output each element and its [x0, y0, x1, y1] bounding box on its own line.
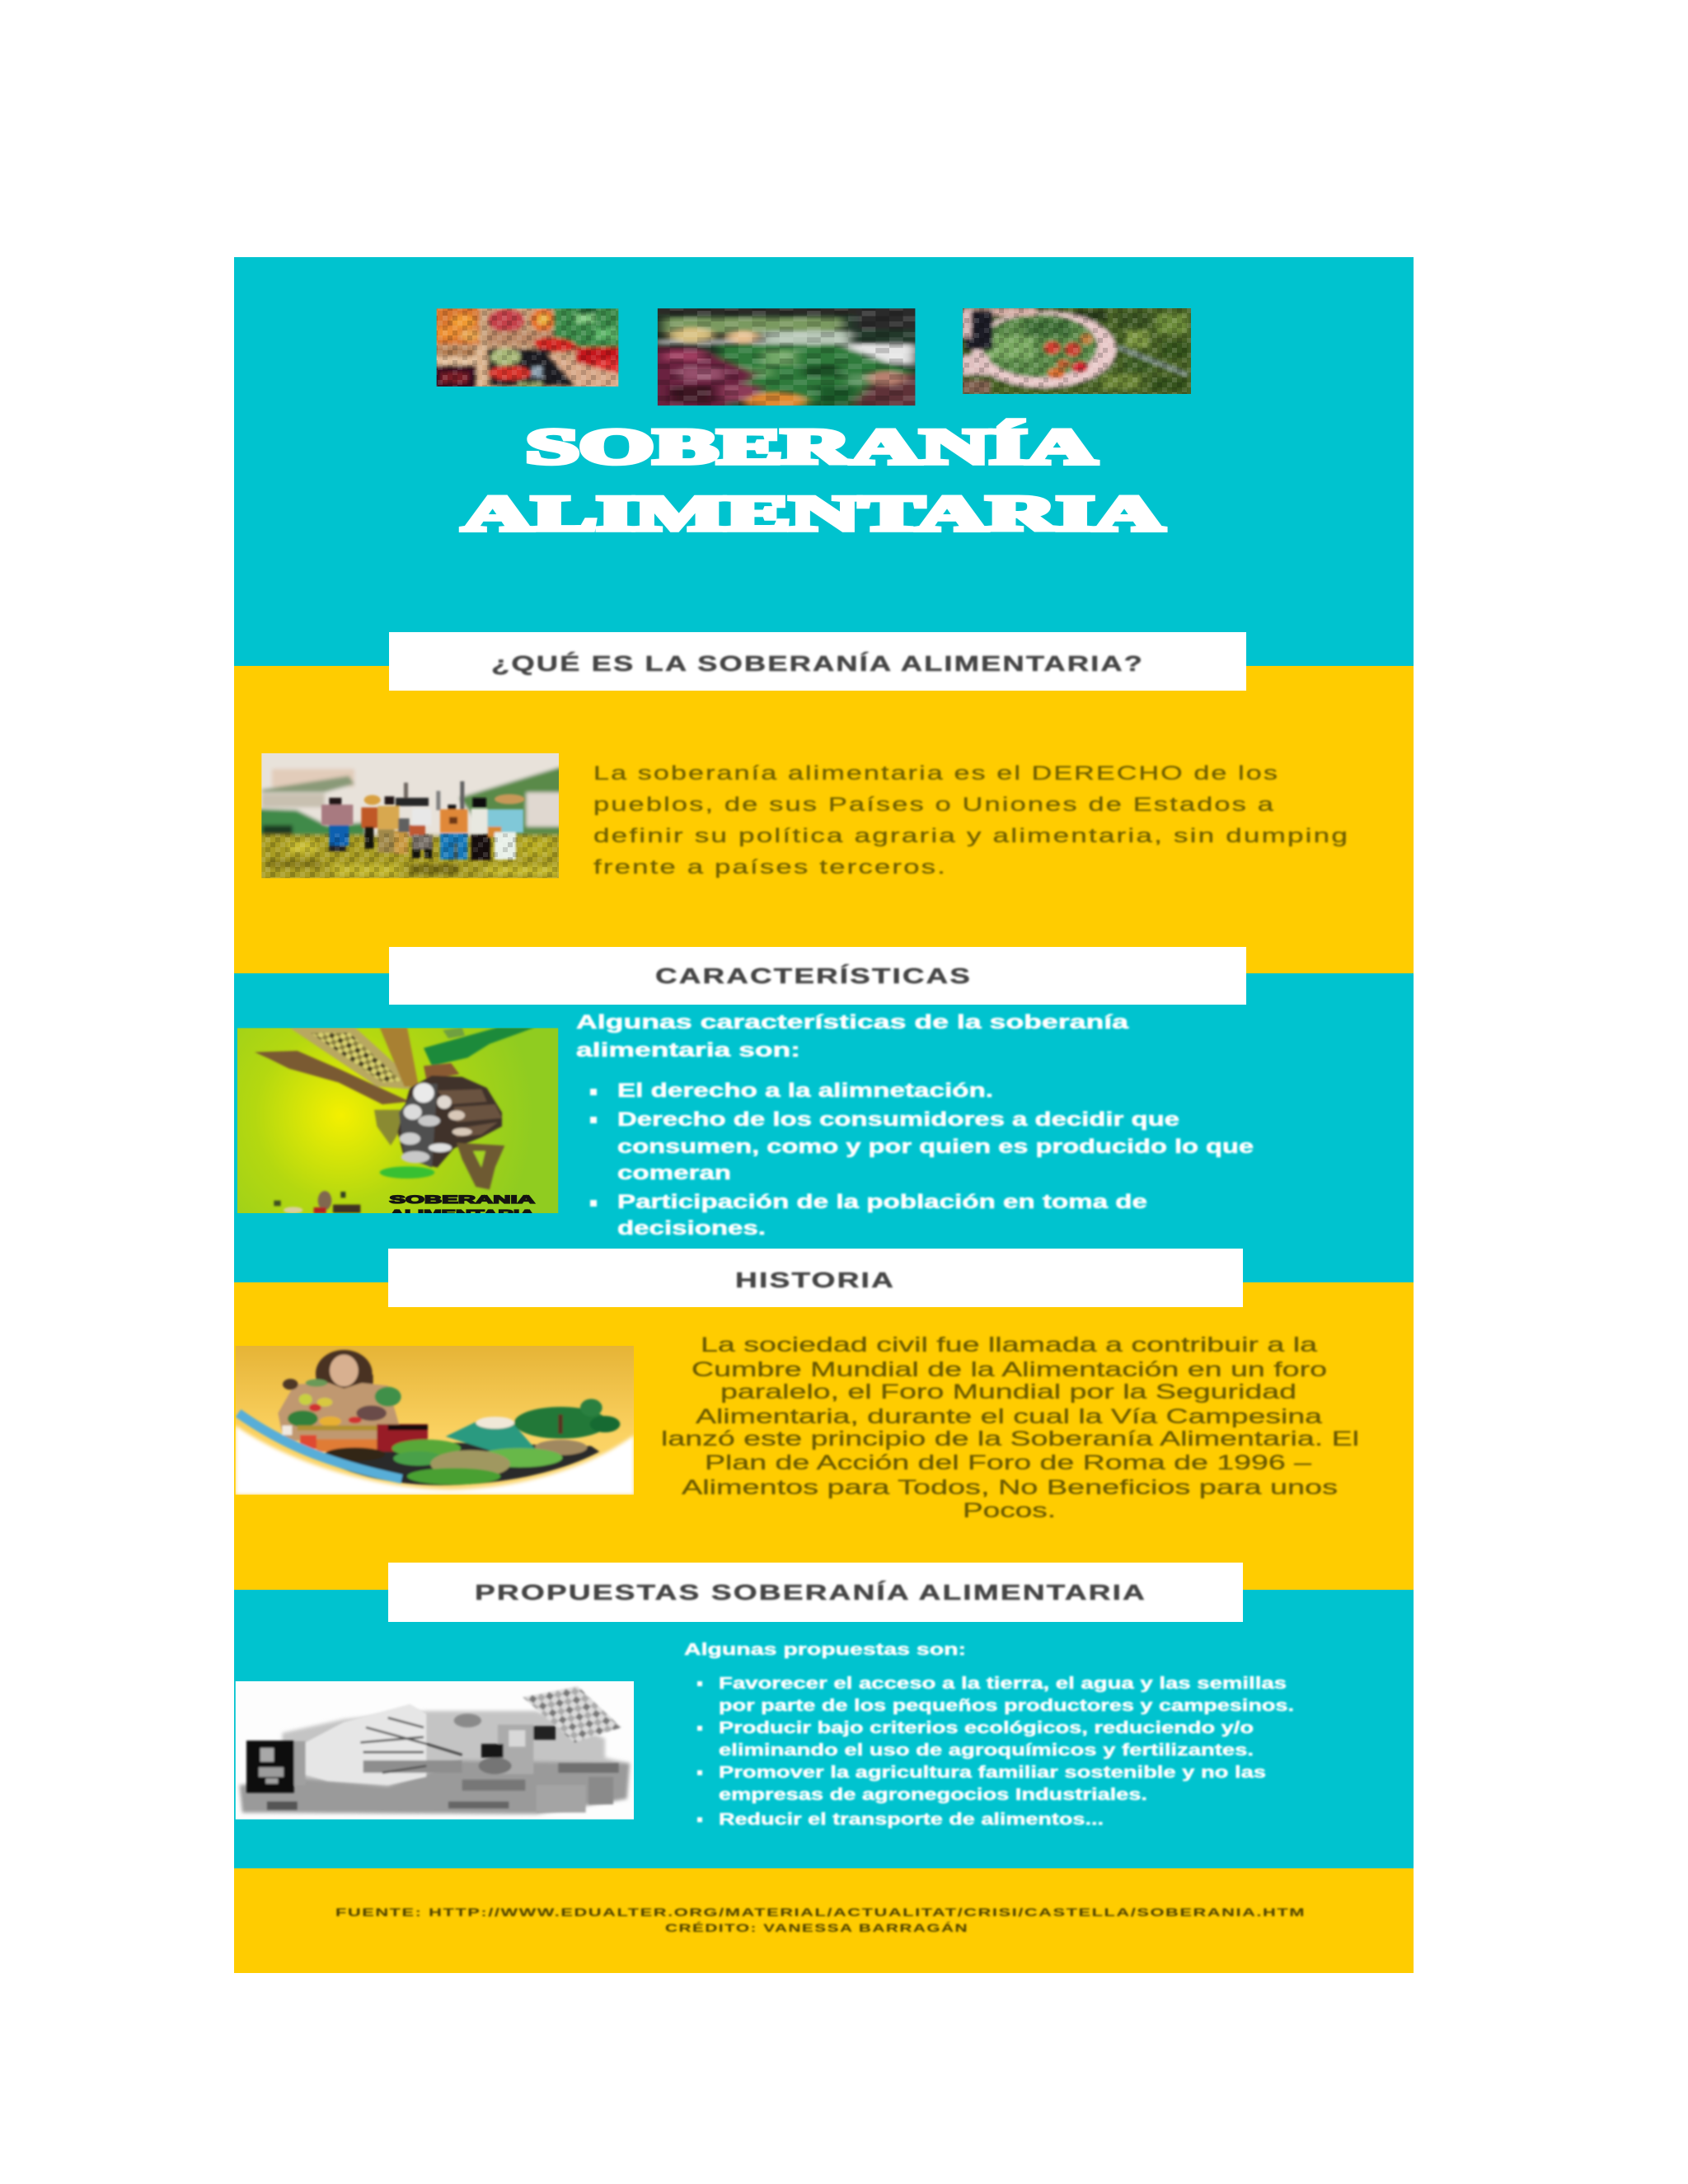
proposals list: empresas de agronegocios Industriales. — [719, 1786, 1147, 1804]
source and credit: CRÉDITO: VANESSA BARRAGÁN — [665, 1921, 968, 1934]
image: fist holding corn poster: ALIMENTARIA — [389, 1207, 535, 1220]
heading: Propuestas soberanía alimentaria: PROPUESTAS SOBERANÍA ALIMENTARIA — [475, 1580, 1146, 1605]
heading: Propuestas soberanía alimentaria — [388, 1563, 1243, 1622]
history text: Plan de Acción del Foro de Roma de 1996 – — [705, 1451, 1311, 1474]
history text: La sociedad civil fue llamada a contribuir a la — [701, 1333, 1317, 1357]
heading: Características — [389, 947, 1246, 1005]
characteristics intro — [576, 1011, 1129, 1062]
characteristics list: comeran — [617, 1162, 731, 1184]
proposals list: Favorecer el acceso a la tierra, el agua y las semillas — [719, 1675, 1287, 1693]
photo: market stall — [658, 308, 915, 405]
source and credit: FUENTE: HTTP://WWW.EDUALTER.ORG/MATERIAL/ACTUALITAT/CRISI/CASTELLA/SOBERANIA.HTM — [335, 1905, 1306, 1919]
photo: vegetables in crates — [437, 308, 618, 387]
history text: Cumbre Mundial de la Alimentación en un foro — [692, 1358, 1327, 1381]
proposals list — [697, 1675, 1294, 1829]
proposals list: por parte de los pequeños productores y campesinos. — [719, 1697, 1294, 1715]
heading: Historia — [388, 1249, 1243, 1307]
image: woman and landscape in a bowl — [236, 1346, 634, 1495]
proposals list: Producir bajo criterios ecológicos, reduciendo y/o — [719, 1719, 1254, 1737]
characteristics list: El derecho a la alimnetación. — [617, 1080, 993, 1102]
title: ALIMENTARIA — [462, 486, 1164, 541]
proposals intro: Algunas propuestas son: — [684, 1641, 966, 1659]
panel: characteristics — [234, 973, 1414, 1282]
history text — [661, 1333, 1359, 1522]
definition text: pueblos, de sus Países o Uniones de Estados a — [593, 794, 1275, 816]
history text: Pocos. — [963, 1499, 1056, 1522]
image: group of peasants in a field — [261, 753, 559, 879]
source and credit — [335, 1905, 1306, 1934]
title — [462, 419, 1164, 541]
heading: ¿Qué es la soberanía alimentaria? — [389, 632, 1246, 691]
proposals list: eliminando el uso de agroquímicos y fertilizantes. — [719, 1741, 1254, 1760]
definition text — [593, 762, 1349, 879]
heading: Historia: HISTORIA — [735, 1268, 895, 1292]
proposals list: Promover la agricultura familiar sostenible y no las — [719, 1764, 1266, 1782]
panel: proposals — [234, 1590, 1414, 1868]
definition text: frente a países terceros. — [593, 856, 947, 879]
proposals list: Reducir el transporte de alimentos... — [719, 1811, 1104, 1829]
photo: bowl of harvested vegetables — [963, 308, 1191, 394]
heading: ¿Qué es la soberanía alimentaria?: ¿QUÉ ES LA SOBERANÍA ALIMENTARIA? — [491, 651, 1144, 676]
panel: definition — [234, 666, 1414, 973]
history text: Alimentaria, durante el cual la Vía Campesina — [696, 1405, 1322, 1428]
heading: Características: CARACTERÍSTICAS — [655, 963, 972, 988]
image: cartoon of hand and peasant — [236, 1681, 634, 1820]
title: SOBERANÍA — [526, 419, 1096, 474]
panel: footer — [234, 1868, 1414, 1973]
characteristics list: Participación de la población en toma de — [617, 1191, 1147, 1213]
characteristics list: consumen, como y por quien es producido lo que — [617, 1136, 1254, 1158]
image: fist holding corn poster — [237, 1028, 558, 1220]
characteristics list — [590, 1080, 1254, 1240]
panel: header with photos and title — [234, 257, 1414, 666]
characteristics list: Derecho de los consumidores a decidir que — [617, 1108, 1179, 1131]
panel: history — [234, 1282, 1414, 1590]
characteristics intro: alimentaria son: — [576, 1039, 800, 1062]
characteristics intro: Algunas características de la soberanía — [576, 1011, 1129, 1033]
definition text: La soberanía alimentaria es el DERECHO de los — [593, 762, 1279, 785]
characteristics list: decisiones. — [617, 1217, 766, 1240]
infographic: Soberanía Alimentaria — [234, 257, 1414, 1973]
image: fist holding corn poster: SOBERANIA — [389, 1193, 535, 1206]
definition text: definir su política agraria y alimentaria, sin dumping — [593, 825, 1349, 847]
history text: lanzó este principio de la Soberanía Alimentaria. El — [661, 1427, 1359, 1451]
history text: paralelo, el Foro Mundial por la Seguridad — [720, 1380, 1296, 1404]
history text: Alimentos para Todos, No Beneficios para unos — [682, 1476, 1338, 1499]
